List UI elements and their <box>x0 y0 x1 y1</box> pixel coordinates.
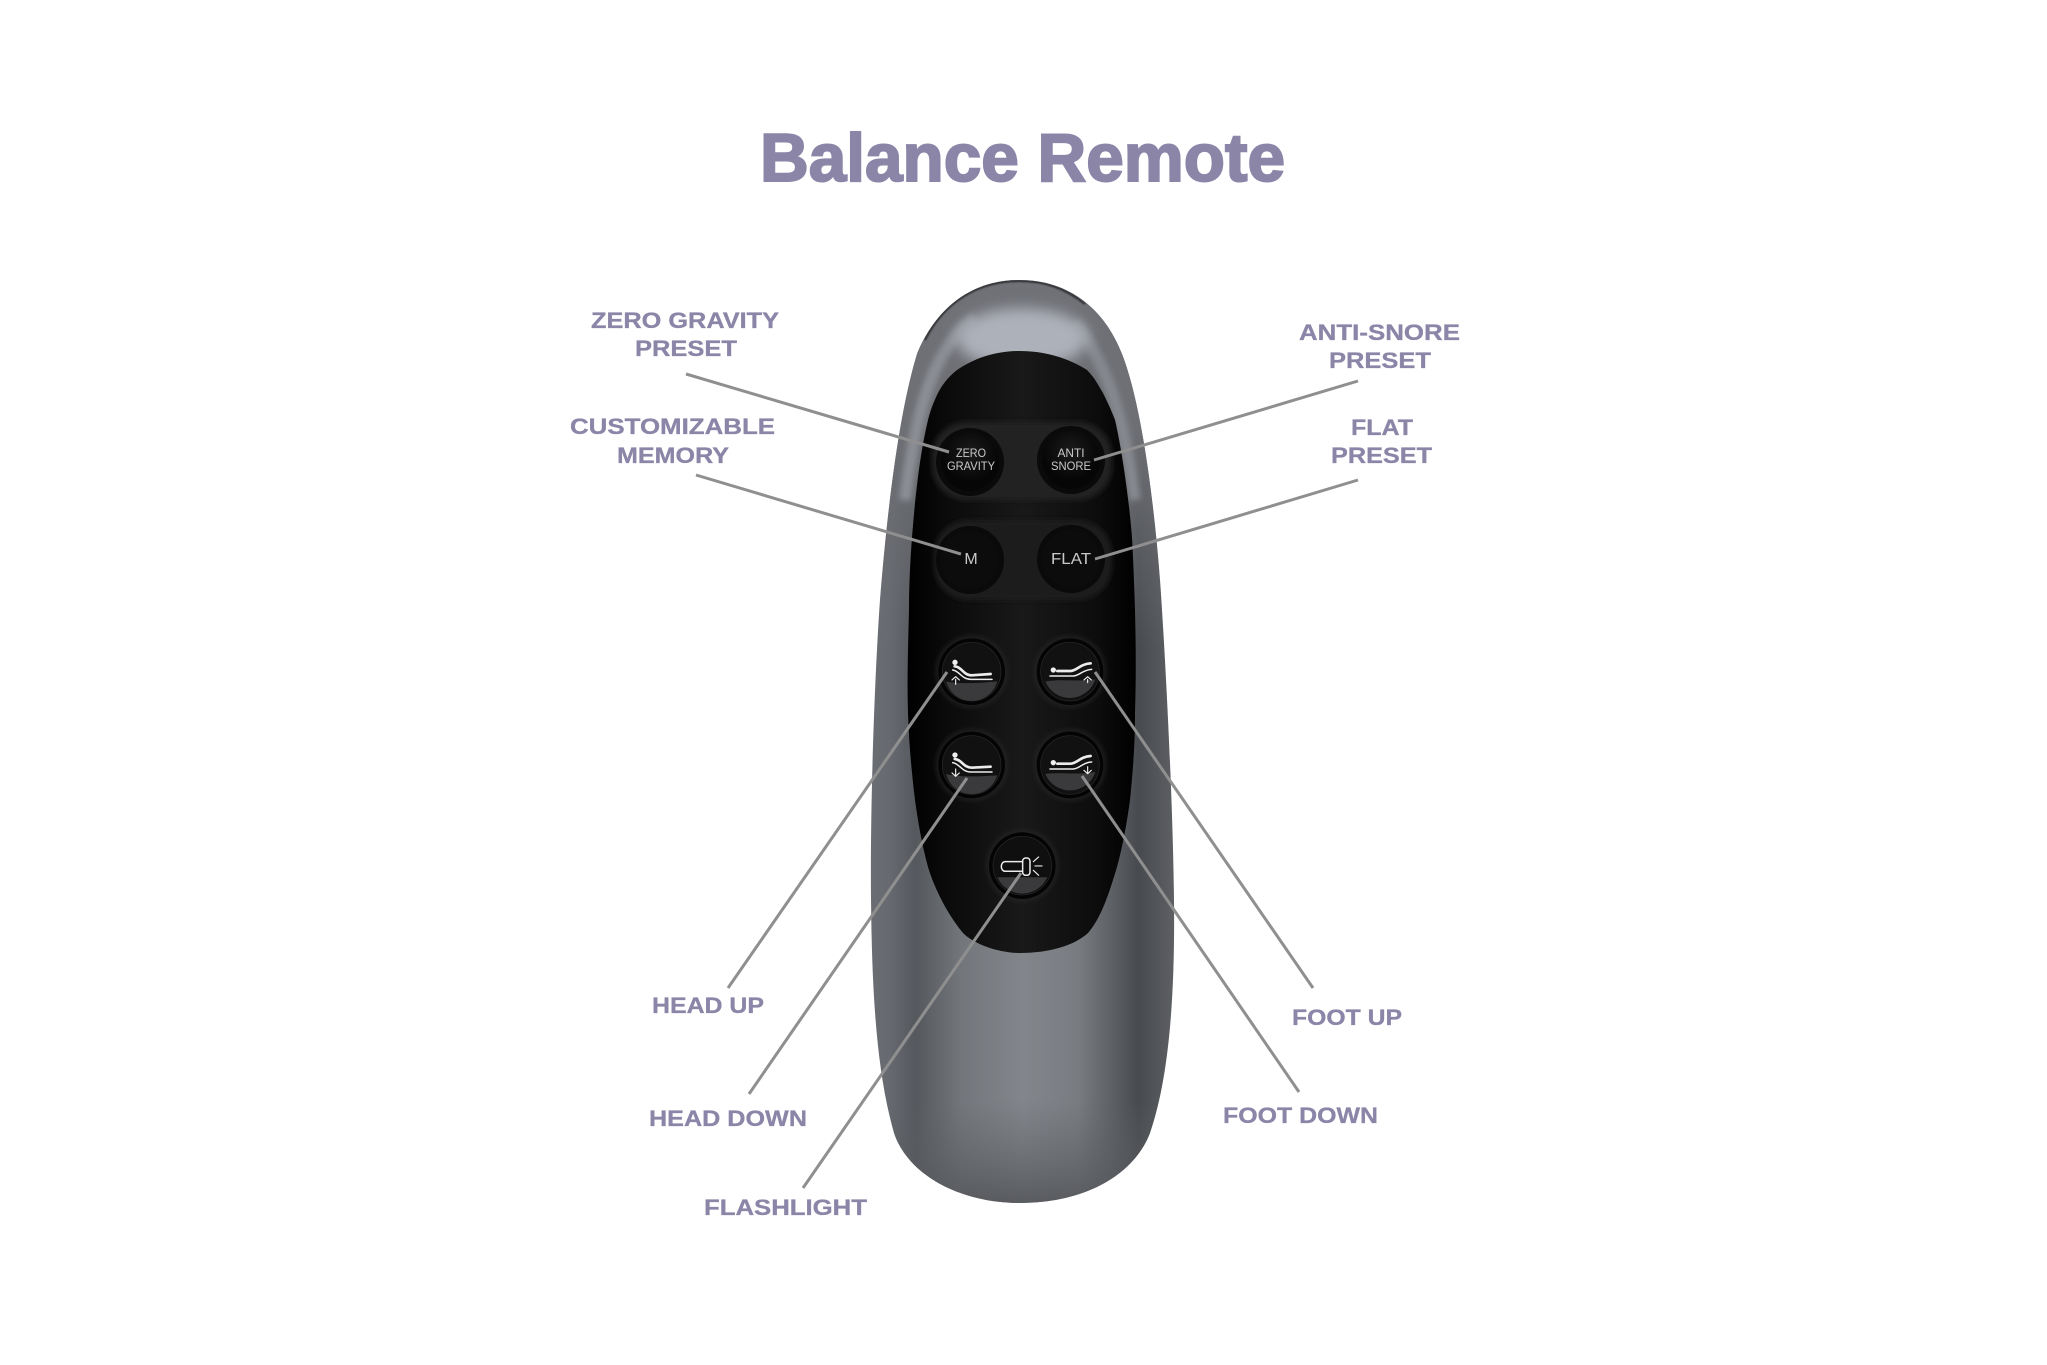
preset button recess bars <box>932 422 1112 600</box>
button: memory <box>936 526 1004 594</box>
button: anti snore: SNORE <box>1051 459 1091 473</box>
label: flashlight: FLASHLIGHT <box>704 1195 868 1220</box>
label: anti-snore preset: ANTI-SNORE <box>1299 320 1460 345</box>
button: zero gravity: GRAVITY <box>947 459 995 473</box>
button panel <box>908 351 1136 953</box>
label: anti-snore preset: PRESET <box>1329 348 1432 373</box>
button: memory: M <box>964 551 978 568</box>
label: zero gravity preset <box>591 308 779 361</box>
label: foot up: FOOT UP <box>1292 1005 1402 1030</box>
label: customizable memory: MEMORY <box>617 443 729 468</box>
label: head up: HEAD UP <box>652 993 764 1018</box>
button: head down <box>932 726 1011 804</box>
title: Balance Remote <box>760 120 1285 196</box>
line: customizable memory <box>696 475 961 554</box>
label: zero gravity preset: ZERO GRAVITY <box>591 308 779 333</box>
button: zero gravity <box>936 428 1004 496</box>
button: flat: FLAT <box>1051 551 1092 568</box>
label: head down: HEAD DOWN <box>649 1106 807 1131</box>
label: customizable memory: CUSTOMIZABLE <box>570 414 775 439</box>
label: customizable memory <box>570 414 775 468</box>
label: anti-snore preset <box>1299 320 1460 373</box>
button: anti snore: ANTI <box>1058 446 1084 460</box>
line: flat <box>1095 480 1358 559</box>
label: zero gravity preset: PRESET <box>635 336 738 361</box>
line: head down <box>749 778 967 1094</box>
label: flat preset <box>1331 415 1433 468</box>
button: anti snore <box>1037 426 1105 494</box>
label: foot down: FOOT DOWN <box>1223 1103 1378 1128</box>
button: flat <box>1037 525 1105 593</box>
button: foot down <box>1031 726 1109 804</box>
line: head up <box>728 672 947 988</box>
line: foot down <box>1082 776 1299 1092</box>
remote control illustration <box>870 280 1174 1203</box>
line: zero gravity <box>686 374 949 452</box>
leader lines <box>686 374 1358 1188</box>
line: flashlight <box>803 873 1021 1188</box>
button: zero gravity: ZERO <box>956 446 986 460</box>
label: flat preset: FLAT <box>1351 415 1414 440</box>
button: flashlight <box>983 826 1062 905</box>
label: flat preset: PRESET <box>1331 443 1433 468</box>
remote body <box>870 280 1174 1203</box>
button: head up <box>932 632 1011 711</box>
button: foot up <box>1031 632 1109 711</box>
line: foot up <box>1095 672 1313 988</box>
line: anti-snore <box>1094 381 1358 460</box>
